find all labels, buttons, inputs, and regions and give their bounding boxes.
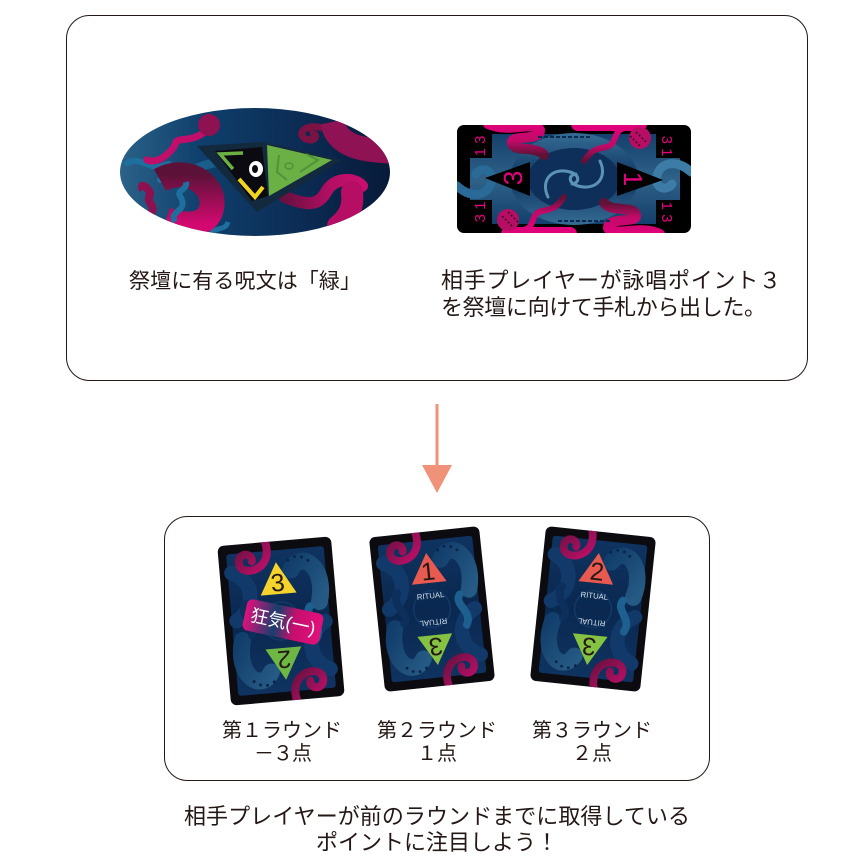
madness label bbox=[242, 598, 324, 646]
red triangle with 1: 1 bbox=[420, 557, 437, 587]
panel: round results bbox=[164, 516, 710, 780]
caption: altar spell: 祭壇に有る呪文は「緑」 bbox=[129, 270, 361, 293]
corner numbers: 3 1 bbox=[658, 136, 675, 156]
corner numbers: 1 3 bbox=[472, 136, 489, 156]
label: round 2 score: 第２ラウンド bbox=[377, 719, 497, 742]
red triangle with 2 bbox=[578, 551, 616, 588]
green triangle with 3: 3 bbox=[581, 631, 598, 661]
green triangle with 3: 3 bbox=[427, 631, 444, 661]
card value: 1: 1 bbox=[618, 172, 648, 186]
altar card triangles bbox=[197, 142, 342, 212]
label: round 3 score bbox=[532, 719, 652, 765]
label: round 2 score: １点 bbox=[417, 742, 457, 765]
red triangle with 1 bbox=[409, 551, 447, 588]
yellow triangle with 3 bbox=[258, 561, 297, 599]
caption: opponent played card bbox=[441, 268, 781, 320]
yellow triangle with 3: 3 bbox=[270, 569, 286, 598]
footer note: 相手プレイヤーが前のラウンドまでに取得している bbox=[184, 804, 690, 829]
ritual text: RITUAL bbox=[416, 590, 445, 602]
ritual text inverted: RITUAL bbox=[577, 616, 606, 628]
card value: 3: 3 bbox=[498, 171, 528, 185]
altar oval illustration bbox=[120, 108, 395, 236]
caption: opponent played card: 相手プレイヤーが詠唱ポイント３ bbox=[441, 268, 781, 293]
card: round 3 bbox=[530, 526, 656, 692]
ritual text: RITUAL bbox=[580, 590, 609, 602]
footer note: ポイントに注目しよう！ bbox=[316, 830, 558, 855]
card: round 1 bbox=[217, 536, 345, 706]
card: round 2 bbox=[369, 526, 495, 692]
corner numbers bbox=[472, 136, 675, 222]
corner numbers: 3 1 bbox=[472, 202, 489, 222]
label: round 3 score: ２点 bbox=[572, 742, 612, 765]
green triangle with 2: 2 bbox=[276, 644, 292, 673]
panel: altar and opponent's card bbox=[66, 16, 808, 380]
green triangle with 2 bbox=[265, 643, 304, 681]
ritual text inverted: RITUAL bbox=[419, 616, 448, 628]
green triangle with 3 bbox=[417, 630, 455, 667]
corner numbers: 1 3 bbox=[658, 202, 675, 222]
label: round 1 score bbox=[222, 719, 342, 765]
label: round 3 score: 第３ラウンド bbox=[532, 719, 652, 742]
red triangle with 2: 2 bbox=[588, 557, 605, 587]
green triangle with 3 bbox=[570, 630, 608, 667]
footer note bbox=[184, 804, 690, 855]
label: round 1 score: 第１ラウンド bbox=[222, 719, 342, 742]
label: round 1 score: －３点 bbox=[254, 742, 312, 765]
madness label: 狂気(一) bbox=[249, 605, 317, 639]
arrow bbox=[422, 404, 452, 493]
caption: opponent played card: を祭壇に向けて手札から出した。 bbox=[441, 295, 766, 320]
label: round 2 score bbox=[377, 719, 497, 765]
wide card illustration bbox=[457, 124, 691, 234]
